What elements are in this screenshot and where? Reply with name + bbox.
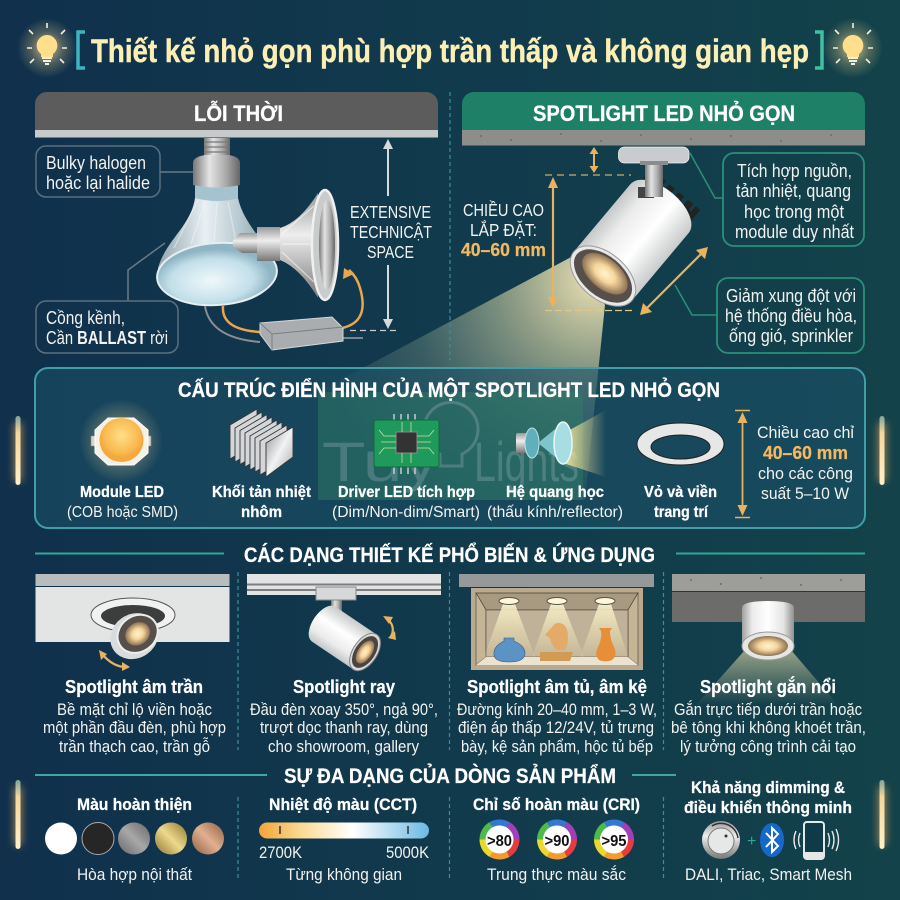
- finish colours: Hòa hợp nội thất: [77, 865, 192, 884]
- heading: LỖI THỜI: LỖI THỜI: [194, 100, 283, 126]
- finish colours: Màu hoàn thiện: [77, 795, 192, 814]
- finish colours: [45, 795, 224, 884]
- component: housing and trim: trang trí: [654, 504, 708, 521]
- CCT scale: 5000K: [386, 844, 429, 862]
- heading: design types: CÁC DẠNG THIẾT KẾ PHỔ BIẾN & ỨNG DỤNG: [244, 542, 655, 567]
- callout: reduces conflicts: hệ thống điều hòa,: [725, 306, 857, 326]
- component: integrated LED driver: Driver LED tích hợp: [338, 484, 475, 501]
- dimension: extensive technical space: TECHNICẬT: [350, 222, 432, 242]
- callout: ballast: [36, 243, 178, 353]
- illustration: track spotlight: [247, 574, 441, 676]
- description: bê tông khi không khoét trần,: [671, 719, 866, 737]
- card: surface mounted spotlight: [671, 574, 866, 756]
- callout: integrated module: module duy nhất: [735, 222, 854, 242]
- component: integrated LED driver: (Dim/Non-dim/Smart): [332, 504, 480, 521]
- badge 80: [476, 816, 523, 863]
- badge 95: [591, 816, 637, 863]
- component: aluminium heat sink: Khối tản nhiệt: [212, 484, 312, 501]
- light beam from spotlight: [318, 255, 605, 500]
- description: Đầu đèn xoay 350°, ngả 90°,: [250, 701, 438, 719]
- panel: compact LED spotlight: [461, 92, 865, 353]
- badge 90: [534, 816, 580, 863]
- dimension: height note: Chiều cao chỉ: [757, 423, 854, 442]
- card: surface mounted spotlight: Spotlight gắn nổi: [700, 676, 836, 697]
- dimension: extensive technical space: SPACE: [367, 242, 414, 262]
- CRI badges: Trung thực màu sắc: [487, 865, 626, 884]
- tube light right lower: [878, 780, 886, 849]
- dimension: install height: 40–60 mm: [461, 239, 546, 260]
- CCT scale: [259, 795, 429, 884]
- description: Đường kính 20–40 mm, 1–3 W,: [457, 701, 657, 719]
- panel: obsolete lamp: [35, 92, 438, 353]
- dimension: install height: LẮP ĐẶT:: [470, 219, 537, 240]
- badge 80: >80: [487, 833, 512, 850]
- component: optical system: (thấu kính/reflector): [487, 504, 623, 521]
- card: track spotlight: Spotlight ray: [293, 677, 395, 697]
- callout: integrated module: học trong một: [744, 202, 844, 222]
- watermark: [318, 392, 583, 500]
- dimension: height note: [735, 410, 854, 518]
- dimension: install height: [461, 147, 633, 310]
- tube light right upper: [878, 416, 886, 485]
- callout: bulky halogen: hoặc lại halide: [46, 173, 150, 193]
- description: [457, 701, 657, 756]
- description: trượt dọc thanh ray, dùng: [260, 719, 428, 737]
- component: aluminium heat sink: nhôm: [241, 504, 282, 521]
- callout: reduces conflicts: [675, 278, 864, 353]
- description: điện áp thấp 12/24V, tủ trưng: [458, 719, 654, 737]
- component: optical system: [487, 410, 623, 521]
- badge 95: >95: [602, 833, 627, 850]
- dimming and smart control: DALI, Triac, Smart Mesh: [685, 865, 852, 884]
- illustration: surface-mounted downlight: [672, 574, 865, 705]
- watermark: Lights: [474, 430, 579, 493]
- illustration: LED spotlight: [559, 147, 705, 318]
- callout: bulky halogen: Bulky halogen: [46, 153, 146, 173]
- description: bày, kệ sản phẩm, hộc tủ bếp: [461, 738, 653, 756]
- dimming and smart control: điều khiển thông minh: [684, 798, 852, 817]
- card: track spotlight: [247, 574, 441, 756]
- icon: smartphone with signal: [794, 822, 838, 859]
- callout: bulky halogen: [36, 146, 193, 197]
- illustration: display niche: [459, 574, 654, 670]
- component: LED module: Module LED: [80, 484, 164, 501]
- dimension: diagonal arrow: [640, 247, 708, 315]
- CCT scale: 2700K: [259, 844, 302, 862]
- illustration: halogen lamp with ballast: [155, 138, 363, 350]
- component: LED module: [67, 399, 178, 521]
- heading: SPOTLIGHT LED NHỎ GỌN: SPOTLIGHT LED NHỎ GỌN: [533, 101, 795, 126]
- CRI badges: Chỉ số hoàn màu (CRI): [473, 795, 640, 814]
- component: optical system: Hệ quang học: [506, 484, 604, 501]
- heading: LỖI THỜI: [35, 92, 438, 138]
- description: lý tưởng công trình cải tạo: [680, 738, 856, 756]
- heading: structure: CẤU TRÚC ĐIỂN HÌNH CỦA MỘT SPOTLIGHT LED NHỎ GỌN: [178, 377, 720, 402]
- icon: left light bulb: [17, 18, 77, 78]
- swatches: [45, 822, 224, 854]
- dimming and smart control: [684, 778, 852, 884]
- description: [250, 701, 438, 756]
- card: cabinet spotlight: [457, 574, 657, 756]
- illustration: recessed ceiling spotlight: [36, 574, 230, 671]
- dimming and smart control: +: [747, 833, 756, 850]
- component: LED module: (COB hoặc SMD): [67, 504, 178, 521]
- card: recessed spotlight: Spotlight âm trần: [65, 677, 203, 697]
- heading: product range: SỰ ĐA DẠNG CỦA DÒNG SẢN PHẨM: [284, 763, 616, 788]
- callout: ballast: Cồng kềnh,: [46, 308, 125, 328]
- callout: reduces conflicts: ống gió, sprinkler: [729, 326, 853, 346]
- CCT scale: Từng không gian: [286, 865, 402, 884]
- description: Bề mặt chỉ lộ viền hoặc: [57, 701, 212, 719]
- description: một phần đầu đèn, phù hợp: [43, 719, 226, 737]
- description: cho showroom, gallery: [268, 738, 420, 756]
- component: aluminium heat sink: [212, 409, 312, 521]
- description: Gắn trực tiếp dưới trần hoặc: [674, 700, 862, 719]
- description: trần thạch cao, trần gỗ: [59, 737, 210, 756]
- title: Thiết kế nhỏ gọn phù hợp trần thấp và không gian hẹp: [91, 33, 809, 69]
- CCT scale: Nhiệt độ màu (CCT): [269, 795, 417, 814]
- component: housing and trim: [637, 423, 724, 521]
- watermark: Tuy: [322, 430, 438, 493]
- callout: integrated module: Tích hợp nguồn,: [737, 161, 852, 181]
- card: recessed spotlight: [36, 574, 230, 756]
- description: [43, 701, 226, 756]
- dimension: extensive technical space: [350, 139, 432, 330]
- callout: ballast: Cần BALLAST rời: [46, 328, 168, 348]
- icon: bluetooth: [760, 823, 784, 857]
- dimension: extensive technical space: EXTENSIVE: [350, 202, 431, 222]
- callout: integrated module: [690, 153, 864, 246]
- CRI badges: [473, 795, 640, 884]
- tube light left upper: [14, 416, 22, 485]
- dimension: height note: 40–60 mm: [763, 443, 848, 463]
- tube light left lower: [14, 780, 22, 849]
- dimming and smart control: Khả năng dimming &: [691, 778, 845, 797]
- dimension: install height: CHIỀU CAO: [463, 199, 544, 220]
- callout: reduces conflicts: Giảm xung đột với: [726, 286, 856, 306]
- heading: SPOTLIGHT LED NHỎ GỌN: [462, 92, 865, 146]
- icon: right light bulb: [823, 18, 883, 78]
- callout: integrated module: tản nhiệt, quang: [736, 181, 851, 201]
- badge 90: >90: [544, 833, 570, 850]
- description: [671, 700, 866, 756]
- card: cabinet spotlight: Spotlight âm tủ, âm kệ: [467, 677, 647, 697]
- component: integrated LED driver: [332, 414, 480, 521]
- panel: typical structure: [35, 368, 865, 528]
- icon: dimmer knob: [702, 821, 740, 859]
- component: housing and trim: Vỏ và viền: [644, 484, 717, 501]
- dimension: height note: suất 5–10 W: [761, 484, 849, 503]
- dimension: height note: cho các công: [758, 464, 853, 483]
